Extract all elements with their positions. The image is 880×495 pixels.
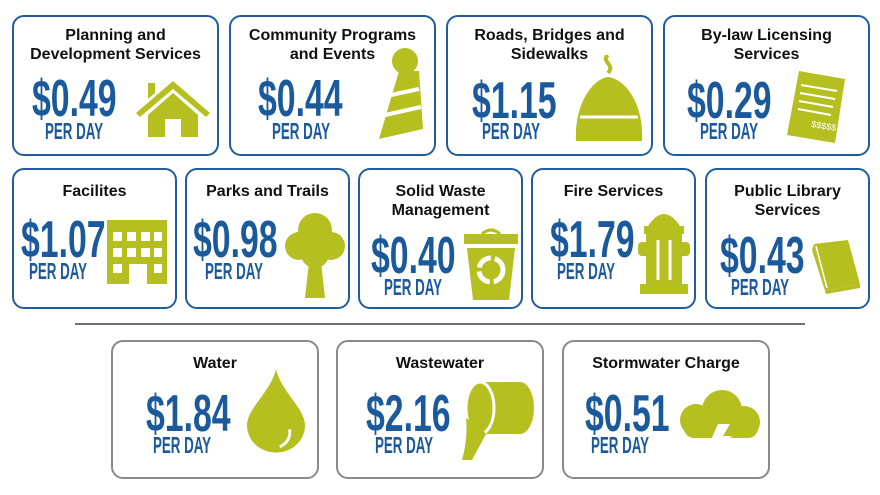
price: $0.49 — [32, 70, 117, 128]
per day: PER DAY — [482, 118, 540, 144]
icon: recycling bin — [464, 228, 518, 300]
heading: Community Programs — [249, 27, 416, 44]
icon: house — [136, 81, 210, 137]
per day: PER DAY — [29, 258, 87, 284]
price: $0.98 — [193, 211, 278, 269]
heading: Roads, Bridges and — [474, 27, 625, 44]
per day: PER DAY — [45, 118, 103, 144]
panel: parks — [185, 168, 350, 309]
panel: planning — [12, 15, 219, 156]
heading: Management — [392, 202, 489, 219]
panel: stormwater — [562, 340, 770, 479]
per day: PER DAY — [557, 258, 615, 284]
panel: fire — [531, 168, 696, 309]
icon: license document: $$$$$ — [811, 119, 837, 133]
heading: Facilites — [62, 183, 127, 200]
heading: Public Library — [734, 183, 841, 200]
panel: by-law — [663, 15, 870, 156]
heading: Sidewalks — [511, 46, 588, 63]
panel: roads — [446, 15, 653, 156]
icon: tree — [285, 213, 345, 298]
heading — [701, 27, 832, 63]
heading — [30, 27, 201, 63]
per day: PER DAY — [384, 274, 442, 300]
heading: Stormwater Charge — [592, 355, 740, 372]
price: $1.07 — [21, 211, 106, 269]
heading: Water — [193, 355, 237, 372]
per day: PER DAY — [153, 432, 211, 458]
heading — [734, 183, 841, 219]
heading: By-law Licensing — [701, 27, 832, 44]
icon: storm cloud — [680, 390, 760, 438]
panel: water — [111, 340, 319, 479]
price: $2.16 — [366, 385, 451, 443]
panel: community — [229, 15, 436, 156]
price: $0.44 — [258, 70, 343, 128]
heading — [249, 27, 416, 63]
price: $1.84 — [146, 385, 231, 443]
heading — [392, 183, 490, 219]
per day: PER DAY — [700, 118, 758, 144]
icon: license document — [787, 71, 845, 143]
icon: party hat — [379, 48, 423, 139]
panel: library — [705, 168, 870, 309]
price: $0.51 — [585, 385, 670, 443]
per day: PER DAY — [272, 118, 330, 144]
heading: Planning and — [65, 27, 166, 44]
price: $0.40 — [371, 227, 456, 285]
heading: Wastewater — [396, 355, 484, 372]
heading: Development Services — [30, 46, 201, 63]
icon: pipe pouring — [462, 382, 534, 460]
heading: Solid Waste — [395, 183, 486, 200]
per day: PER DAY — [731, 274, 789, 300]
icon: fire hydrant — [638, 214, 690, 294]
icon: building — [107, 220, 167, 284]
per day: PER DAY — [205, 258, 263, 284]
heading: Services — [734, 46, 799, 63]
per day: PER DAY — [591, 432, 649, 458]
heading: and Events — [290, 46, 375, 63]
price: $0.43 — [720, 227, 805, 285]
price: $1.15 — [472, 72, 557, 130]
heading: Parks and Trails — [206, 183, 329, 200]
panel: facilities — [12, 168, 177, 309]
panel: wastewater — [336, 340, 544, 479]
icon: book — [812, 240, 860, 294]
heading: Services — [755, 202, 820, 219]
per day: PER DAY — [375, 432, 433, 458]
price: $0.29 — [687, 72, 772, 130]
icon: asphalt pile — [576, 55, 642, 141]
heading — [474, 27, 625, 63]
icon: water drop — [247, 370, 305, 453]
price: $1.79 — [550, 211, 635, 269]
panel: solid waste — [358, 168, 523, 309]
heading: Fire Services — [564, 183, 663, 200]
